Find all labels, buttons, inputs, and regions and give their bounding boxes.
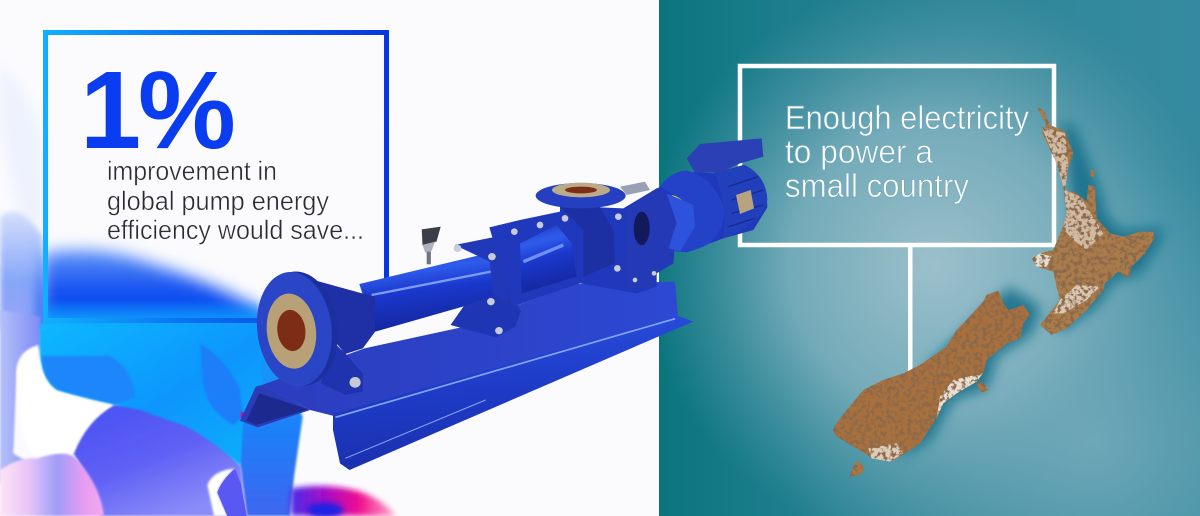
outlet flange: [536, 183, 626, 208]
shaft opening: [634, 212, 650, 245]
map shadows: [901, 122, 1164, 458]
motor adapter: [660, 171, 725, 252]
pipe highlight: [372, 272, 491, 295]
fluid artwork: lower shapes: [0, 310, 397, 516]
left background panel: [0, 0, 659, 516]
base front face: [333, 316, 693, 470]
text: improvement statement: [107, 156, 364, 245]
text: electricity statement: small country: [785, 167, 969, 204]
base lip inner: [246, 393, 308, 425]
clamp block: [455, 237, 512, 300]
text: electricity statement: to power a: [785, 133, 934, 170]
headline: 1%: 1%: [80, 49, 236, 172]
solid drive silhouette: [489, 165, 767, 307]
pump body barrel: [520, 225, 577, 293]
callout box outline: [740, 66, 1054, 245]
sensor: [422, 227, 441, 264]
text: electricity statement: Enough electricity: [785, 99, 1029, 136]
suction pipe: [359, 252, 498, 332]
barrel highlight: [523, 245, 563, 262]
clamp bolts: [454, 245, 503, 334]
outlet neck: [560, 207, 615, 277]
rear support: [451, 290, 521, 337]
pump: drive end: [489, 138, 767, 307]
drive bolts: [511, 213, 656, 282]
right sea panel: [659, 0, 1200, 516]
pump: base and suction end: [240, 227, 693, 470]
pipe connector: [314, 280, 375, 354]
terminal box: [687, 138, 763, 173]
text: improvement statement: efficiency would save...: [107, 215, 364, 245]
foot bolt: [349, 377, 361, 388]
bearing housing: [625, 188, 677, 290]
fluid artwork: upper wash: [0, 63, 280, 353]
small islands: [849, 170, 1095, 477]
base plate top: [262, 282, 678, 417]
north island: [1032, 107, 1154, 335]
south island: [833, 291, 1030, 462]
text: improvement statement: global pump energy: [107, 186, 329, 216]
callout connector line: [908, 245, 912, 377]
text: electricity statement: [785, 99, 1029, 204]
motor fins: [728, 177, 763, 227]
base left lip: [240, 385, 310, 427]
relief map: New Zealand: [833, 107, 1164, 477]
adapter collar: [667, 193, 695, 252]
front foot: [321, 343, 363, 395]
motor body: [715, 165, 767, 238]
text: improvement statement: improvement in: [107, 156, 277, 186]
white box outline: [46, 32, 386, 320]
warning label: [672, 195, 684, 203]
outlet brass rim: [552, 183, 610, 197]
motor plate: [736, 190, 754, 214]
inlet flange: [251, 268, 344, 390]
base highlights: [335, 319, 675, 458]
name plate: [620, 182, 650, 195]
outlet bore: [565, 187, 597, 193]
